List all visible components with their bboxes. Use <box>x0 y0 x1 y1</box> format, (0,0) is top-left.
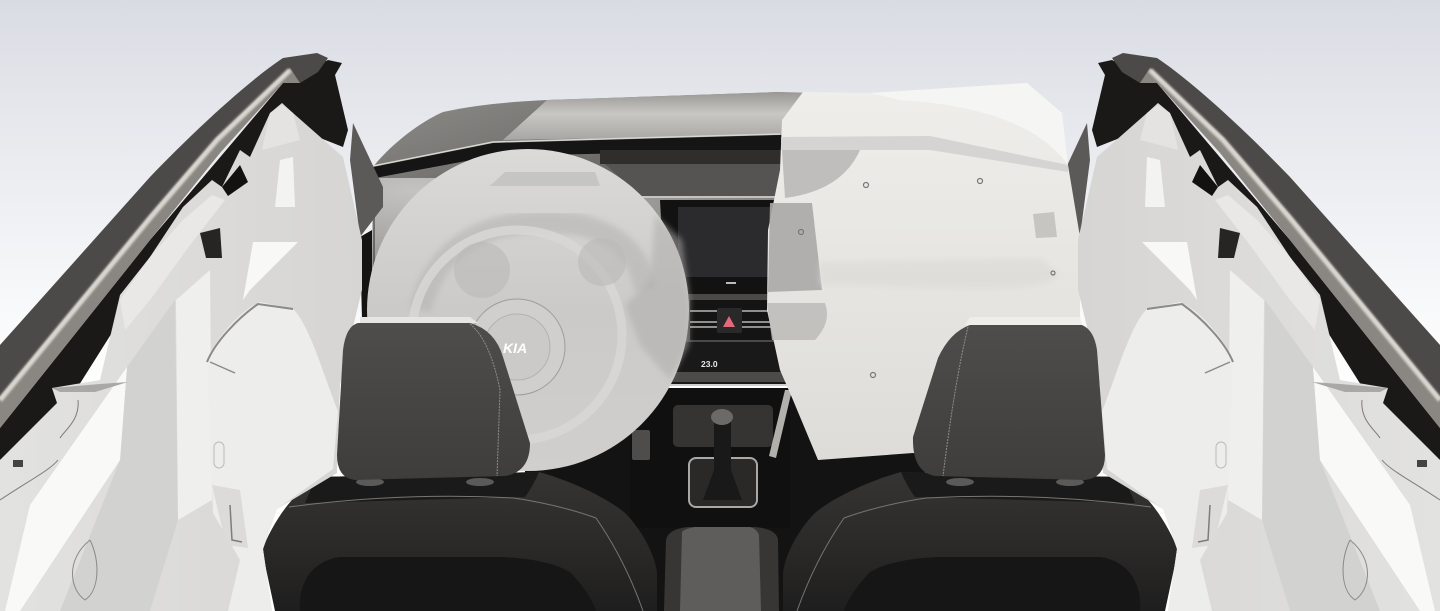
right side airbag <box>1102 302 1233 611</box>
center stack and console <box>625 200 792 611</box>
lower console panel with gear shifter <box>630 388 792 528</box>
air vents and hazard button <box>625 294 790 342</box>
left seat <box>262 472 657 611</box>
steering wheel and gauges ghost <box>412 172 690 440</box>
right seat <box>783 472 1178 611</box>
climate display: 23.0 <box>701 359 718 369</box>
left side airbag <box>207 302 338 611</box>
left headrest <box>337 317 530 480</box>
driver airbag <box>367 149 690 471</box>
floor and footwell shadow <box>525 395 925 611</box>
right curtain airbag <box>1078 103 1440 611</box>
infotainment screen <box>660 200 780 294</box>
passenger airbag <box>767 83 1080 480</box>
left curtain airbag <box>0 103 362 611</box>
armrest <box>664 527 779 611</box>
climate display <box>640 342 792 385</box>
right A-pillar and roof rail <box>1057 53 1440 460</box>
right headrest <box>913 317 1105 480</box>
ghost dashboard detail <box>782 150 860 198</box>
steering wheel logo: KIA <box>503 340 527 356</box>
left A-pillar and roof rail <box>0 53 383 460</box>
dashboard top and windscreen base <box>372 92 1072 310</box>
speaker grille <box>605 164 785 196</box>
fastening rings <box>798 178 1055 378</box>
